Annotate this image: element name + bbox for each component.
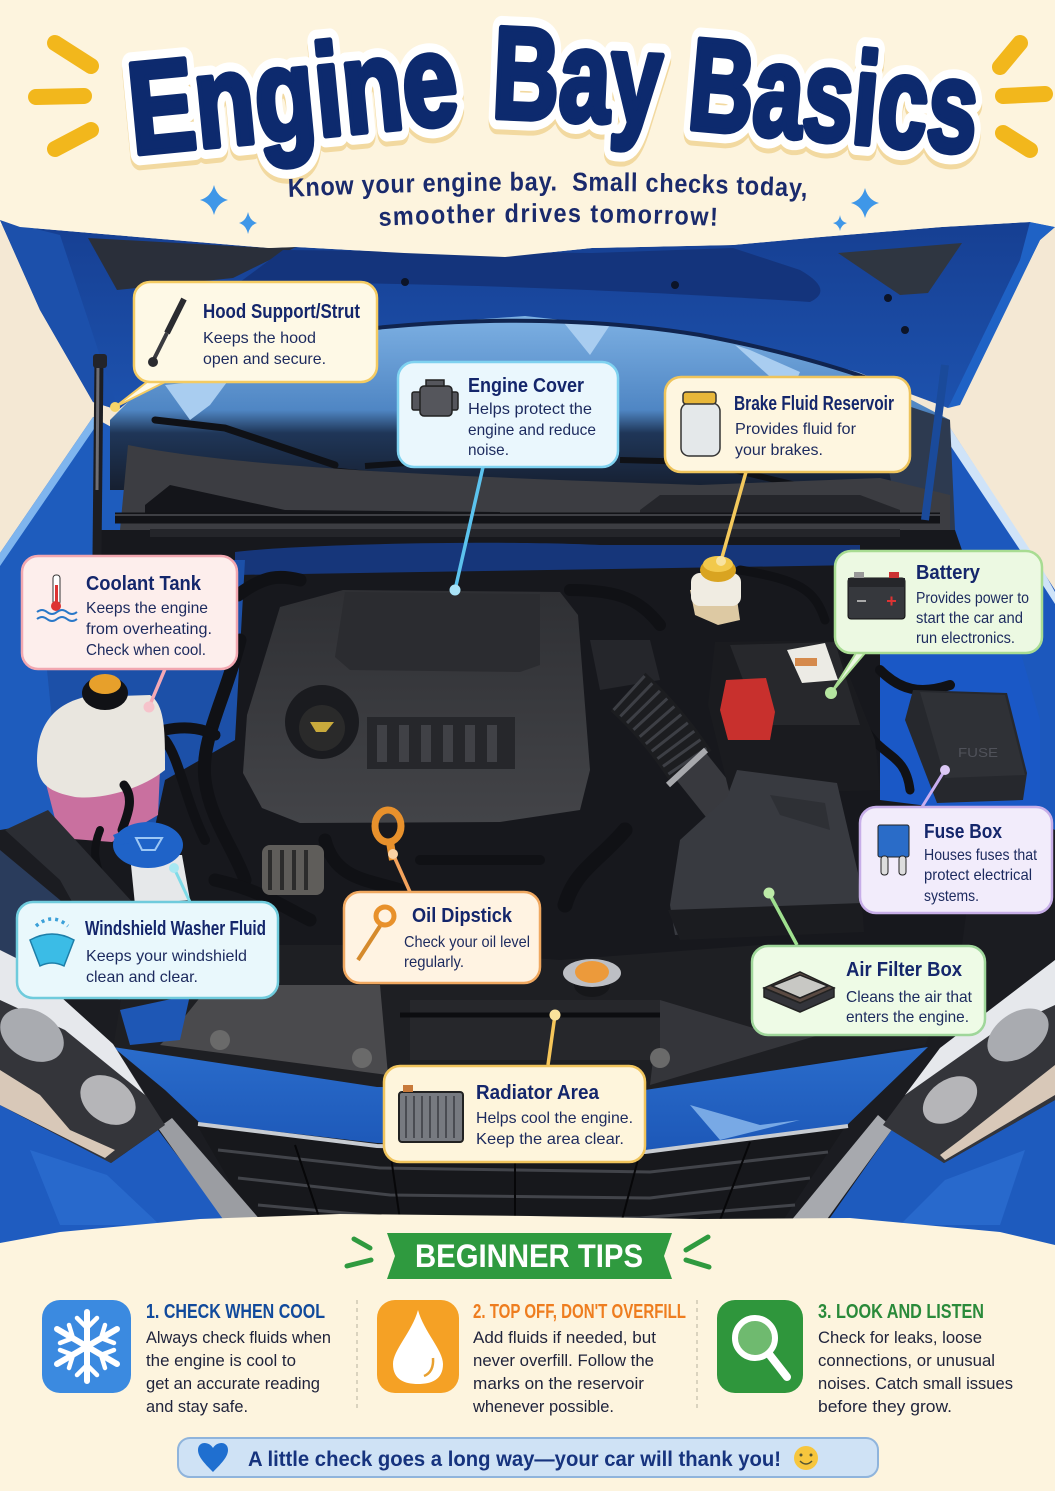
callout: radiator area: Radiator Area: [476, 1082, 600, 1104]
subtitle: [289, 172, 806, 226]
icon: magnifier: [717, 1300, 803, 1393]
dark battery tray plate: [5, 810, 135, 925]
callout: battery: [825, 551, 1042, 699]
title: Engine: [122, 11, 463, 187]
callout: engine cover: [398, 362, 618, 596]
tip 1: and stay safe.: [146, 1397, 248, 1416]
tip 1: get an accurate reading: [146, 1374, 320, 1393]
icon: battery: [848, 572, 905, 619]
callout: fuse box: systems.: [924, 888, 979, 905]
callout: oil dipstick: regularly.: [404, 954, 464, 971]
icon: thermometer: [37, 575, 77, 621]
callout: engine cover: noise.: [468, 442, 509, 459]
icon: dipstick: [358, 907, 394, 960]
oil dipstick: [375, 810, 401, 860]
tip 2: never overfill. Follow the: [473, 1351, 654, 1370]
tip 2: Add fluids if needed, but: [473, 1328, 656, 1347]
radiator support panel: [113, 945, 945, 1092]
tip 2: marks on the reservoir: [473, 1374, 644, 1393]
callout: fuse box: [860, 765, 1052, 913]
icon: engine: [412, 380, 458, 416]
icon: drop: [377, 1300, 459, 1393]
icon: strut: [148, 299, 184, 367]
wipers: [155, 420, 880, 505]
right inner fender: [880, 650, 1040, 820]
callout: battery: run electronics.: [916, 630, 1015, 647]
chrome strips: [158, 1115, 893, 1222]
icon: snowflake: [42, 1300, 131, 1393]
callout: hood support: Keeps the hood: [203, 330, 316, 347]
callout: coolant tank: [22, 556, 237, 712]
callout: fuse box: Houses fuses that: [924, 847, 1037, 864]
coolant tank: [37, 674, 165, 875]
callout: radiator area: Keep the area clear.: [476, 1131, 624, 1148]
callout: windshield washer fluid: clean and clear.: [86, 969, 198, 986]
tip 2: 2. TOP OFF, DON'T OVERFILL: [473, 1301, 686, 1323]
subtitle: smoother drives tomorrow!: [380, 203, 716, 226]
hoses: [165, 570, 950, 920]
tip 1: [42, 1300, 331, 1416]
title: Bay: [490, 0, 666, 152]
callout: oil dipstick: Check your oil level: [404, 934, 530, 951]
callout: brake fluid: Brake Fluid Reservoir: [734, 393, 894, 415]
subtitle: Know your engine bay. Small checks today,: [289, 172, 806, 202]
icon: fuse: [878, 825, 909, 875]
callout: coolant tank: Keeps the engine: [86, 600, 208, 617]
tip 2: whenever possible.: [472, 1397, 614, 1416]
title: [122, 0, 984, 187]
callout: battery: Provides power to: [916, 590, 1029, 607]
callout: hood support: Hood Support/Strut: [203, 301, 360, 323]
torn paper top edge: [0, 0, 1055, 257]
callout: air filter box: Air Filter Box: [846, 959, 962, 981]
battery: [708, 640, 880, 795]
grille: [197, 1124, 848, 1225]
footer banner: A little check goes a long way—your car will thank you!: [248, 1448, 781, 1471]
heading: beginner tips banner: BEGINNER TIPS: [415, 1238, 643, 1274]
fuse box: FUSE: [958, 745, 998, 760]
callout: windshield washer fluid: Windshield Washer Fluid: [85, 918, 266, 940]
callout: fuse box: protect electrical: [924, 867, 1032, 884]
icon: smiley: [794, 1446, 818, 1470]
callout: brake fluid: [665, 377, 910, 566]
callout: air filter box: enters the engine.: [846, 1009, 969, 1026]
callout: hood support: [110, 282, 377, 412]
tip 1: 1. CHECK WHEN COOL: [146, 1301, 325, 1323]
callout: oil dipstick: Oil Dipstick: [412, 905, 513, 927]
icon: air filter: [764, 972, 834, 1012]
fuse box: [905, 690, 1027, 803]
alternator: [262, 845, 324, 895]
callout: windshield washer fluid: [17, 863, 278, 998]
callout: windshield washer fluid: Keeps your windshield: [86, 948, 247, 965]
callout: coolant tank: Coolant Tank: [86, 573, 202, 595]
title: Basics: [684, 11, 984, 181]
radiator cap: [563, 959, 621, 997]
sparkles: [200, 185, 879, 234]
icon: reservoir: [681, 392, 720, 456]
tip 2: [377, 1300, 686, 1416]
tip 3: noises. Catch small issues: [818, 1374, 1013, 1393]
callout: engine cover: Engine Cover: [468, 375, 584, 397]
engine bay base: [60, 530, 1000, 960]
title: Bay: [490, 0, 666, 152]
heading: beginner tips banner: [347, 1233, 709, 1279]
callout: fuse box: Fuse Box: [924, 821, 1002, 843]
tip 3: 3. LOOK AND LISTEN: [818, 1301, 984, 1323]
icon: washer: [30, 919, 74, 966]
brake reservoir: [690, 556, 741, 625]
tip 3: Check for leaks, loose: [818, 1328, 982, 1347]
washer fluid cap: [113, 822, 190, 905]
callout: hood support: open and secure.: [203, 351, 326, 368]
hood: [0, 220, 1055, 410]
hood strut: [93, 354, 945, 555]
tip 1: Always check fluids when: [146, 1328, 331, 1347]
strut bar: [115, 512, 940, 524]
intake tube: [590, 640, 722, 805]
title: Bay: [490, 4, 666, 157]
icon: heart: [198, 1443, 228, 1472]
cowl: [120, 445, 950, 530]
tip 1: the engine is cool to: [146, 1351, 296, 1370]
engine cover: [243, 590, 590, 823]
headlights: [0, 950, 1055, 1163]
callout: coolant tank: from overheating.: [86, 621, 212, 638]
callout: battery: start the car and: [916, 610, 1023, 627]
tip 3: before they grow.: [818, 1397, 952, 1416]
tip 3: [717, 1300, 1013, 1416]
callout: air filter box: [752, 888, 985, 1035]
footer banner: [178, 1438, 878, 1477]
lower fenders: [0, 1100, 1055, 1250]
car engine bay illustration: [0, 220, 1055, 1250]
title: Basics: [684, 16, 984, 186]
callout: coolant tank: Check when cool.: [86, 642, 206, 659]
callout: brake fluid: Provides fluid for: [735, 421, 857, 438]
left inner fender: [40, 560, 245, 850]
callout: brake fluid: your brakes.: [735, 442, 823, 459]
title: Engine: [122, 6, 463, 182]
windshield: [110, 312, 950, 490]
title: Engine: [122, 6, 463, 182]
callout: radiator area: [384, 1010, 645, 1162]
title rays: [36, 43, 1045, 150]
air filter box: [668, 770, 864, 940]
blue front panel: [113, 1047, 928, 1150]
icon: radiator: [399, 1085, 463, 1142]
title: Basics: [684, 11, 984, 181]
callout: engine cover: engine and reduce: [468, 422, 596, 439]
callout: battery: Battery: [916, 562, 981, 584]
callout: air filter box: Cleans the air that: [846, 989, 973, 1006]
upper blue firewall: [235, 543, 860, 575]
tip 3: connections, or unusual: [818, 1351, 995, 1370]
torn paper tips section background: [0, 1214, 1055, 1491]
hood dark panels: [88, 238, 296, 290]
callout: oil dipstick: [344, 849, 540, 983]
callout: radiator area: Helps cool the engine.: [476, 1110, 633, 1127]
callout: engine cover: Helps protect the: [468, 401, 592, 418]
